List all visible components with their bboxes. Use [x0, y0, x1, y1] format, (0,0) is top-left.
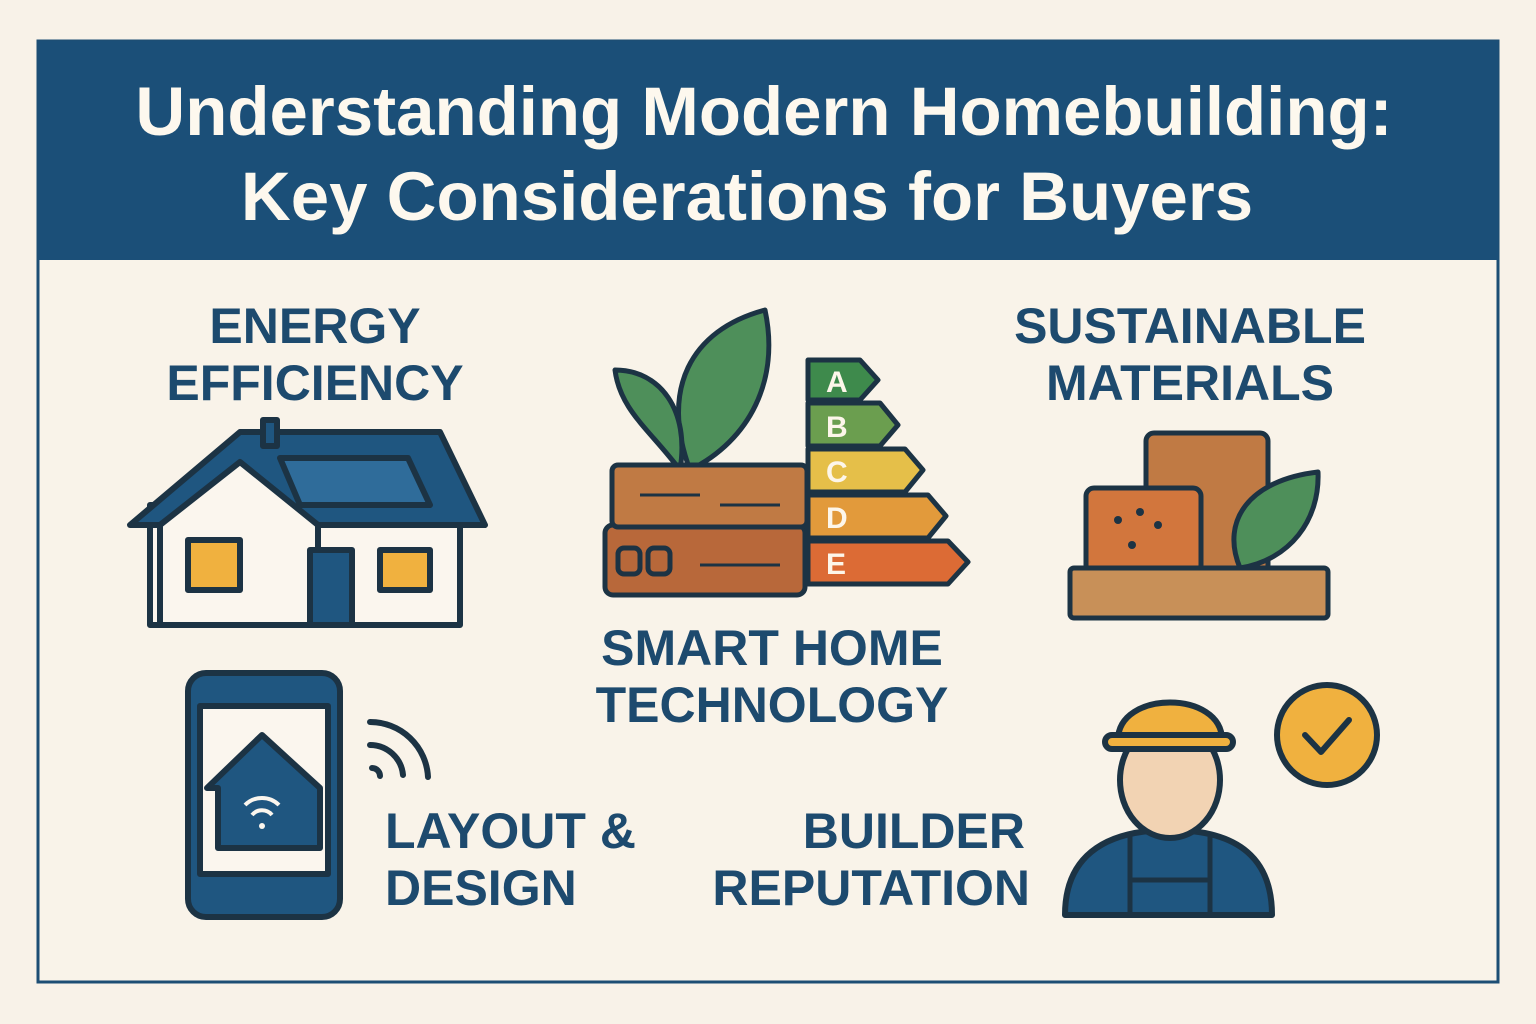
icon: smartphone with home — [188, 673, 428, 917]
text: C — [826, 456, 848, 489]
icon: lumber, leaf and energy label — [605, 310, 968, 595]
title banner: Key Considerations for Buyers — [241, 158, 1253, 235]
icon: house with solar panels — [130, 420, 485, 625]
heading: layout & design — [385, 803, 636, 916]
heading: builder reputation: REPUTATION — [712, 860, 1030, 916]
text: D — [826, 502, 848, 535]
heading: sustainable materials: MATERIALS — [1046, 355, 1334, 411]
heading: sustainable materials — [1014, 298, 1366, 411]
title banner: Understanding Modern Homebuilding: — [135, 73, 1393, 150]
heading: energy efficiency: EFFICIENCY — [166, 355, 464, 411]
title banner — [38, 41, 1498, 260]
heading: energy efficiency: ENERGY — [209, 298, 421, 354]
heading: builder reputation — [712, 803, 1030, 916]
heading: energy efficiency — [166, 298, 464, 411]
heading: smart home technology: TECHNOLOGY — [596, 677, 948, 733]
text: E — [826, 548, 846, 581]
heading: smart home technology: SMART HOME — [601, 620, 943, 676]
text: A — [826, 366, 848, 399]
heading: layout & design: DESIGN — [385, 860, 577, 916]
heading: smart home technology — [596, 620, 948, 733]
icon: materials — [1070, 433, 1328, 618]
heading: builder reputation: BUILDER — [803, 803, 1025, 859]
heading: sustainable materials: SUSTAINABLE — [1014, 298, 1366, 354]
heading: layout & design: LAYOUT & — [385, 803, 636, 859]
icon: builder with check — [1065, 685, 1377, 915]
text: B — [826, 411, 848, 444]
